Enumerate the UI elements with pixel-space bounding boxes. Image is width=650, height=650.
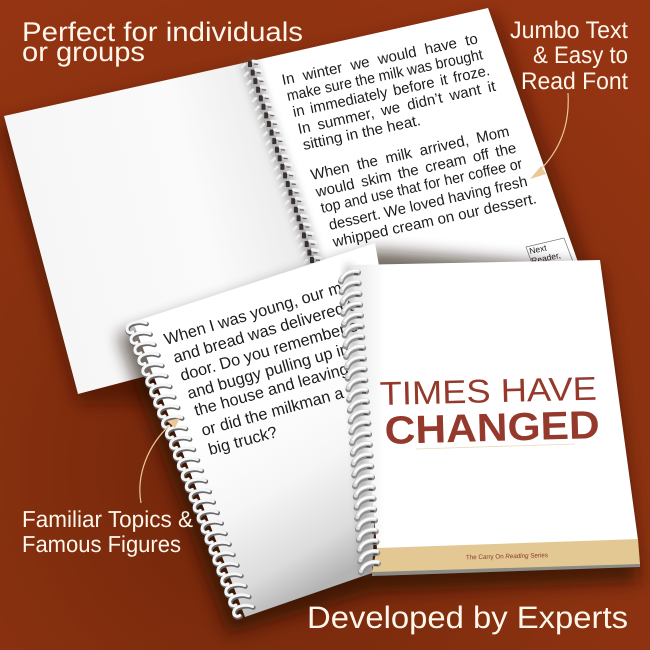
panel: front book open <box>127 243 640 617</box>
arrow: to large text <box>530 93 568 179</box>
front book page body text <box>162 279 360 459</box>
back book page body text: dessert. We loved having fresh <box>327 173 529 234</box>
arrow: to spiral page <box>140 418 180 503</box>
callout: familiar topics: Familiar Topics & <box>22 506 193 532</box>
front book left spiral binding <box>127 322 253 617</box>
callout: jumbo text: Read Font <box>521 68 628 95</box>
front book page body text: or did the milkman a <box>199 384 346 440</box>
shadow of back book <box>0 14 586 404</box>
heading: developed by experts: Developed by Experts <box>307 600 628 635</box>
heading: perfect for individuals or groups: or groups <box>22 37 145 67</box>
next reader box: Next <box>528 242 548 256</box>
shadow of front book <box>118 250 640 634</box>
back book page body text: would skim the cream off the <box>313 140 518 201</box>
back book page body text: In summer, we didn’t want it <box>296 78 498 138</box>
front book page body text: and buggy pulling up in <box>185 340 351 403</box>
cover title <box>379 370 600 453</box>
cover title: CHANGED <box>384 403 600 453</box>
back book spiral binding <box>242 61 321 263</box>
back book page body text: In winter we would have to <box>280 30 479 89</box>
back book page body text: top and use that for her coffee or <box>319 155 524 217</box>
panel: front cover <box>352 260 640 572</box>
back book page body text: whipped cream on our dessert. <box>330 190 538 251</box>
front book page body text: When I was young, our m <box>162 279 344 349</box>
soft shadow beside the cover <box>345 265 372 575</box>
panel: back book open spread <box>4 8 578 394</box>
back book spine shading <box>248 62 316 266</box>
callout: jumbo text <box>510 17 628 95</box>
heading: perfect for individuals or groups <box>22 17 303 67</box>
callout: jumbo text: & Easy to <box>533 42 628 69</box>
front book page body text: and bread was delivered t <box>171 297 355 367</box>
heading: perfect for individuals or groups: Perfect for individuals <box>22 17 303 47</box>
front book left page <box>133 243 385 617</box>
series name: The Carry On Reading Series <box>466 552 549 561</box>
back book page body text: make sure the milk was brought <box>285 46 485 105</box>
cover spiral binding <box>341 271 378 573</box>
cover tan band <box>372 539 640 572</box>
front book page body text: door. Do you remember s <box>178 317 360 385</box>
back book left page <box>4 63 318 394</box>
callout: jumbo text: Jumbo Text <box>510 17 628 44</box>
cover title underline <box>416 444 575 449</box>
cover thickness edge <box>372 562 640 576</box>
cover sheet <box>352 260 638 549</box>
back book page body text: sitting in the heat. <box>301 112 422 154</box>
next reader box <box>526 238 578 285</box>
front book page body text: the house and leaving <box>192 360 351 420</box>
back book page body text <box>280 30 538 251</box>
next reader box: Reader, <box>530 250 562 266</box>
callout: familiar topics <box>22 506 193 557</box>
front book page body text: big truck? <box>206 423 279 459</box>
callout: familiar topics: Famous Figures <box>22 531 181 557</box>
cover title: TIMES HAVE <box>379 370 597 412</box>
back book right page <box>243 8 578 268</box>
back book page body text: When the milk arrived, Mom <box>309 123 511 184</box>
back book page body text: in immediately before it froze. <box>291 62 491 121</box>
